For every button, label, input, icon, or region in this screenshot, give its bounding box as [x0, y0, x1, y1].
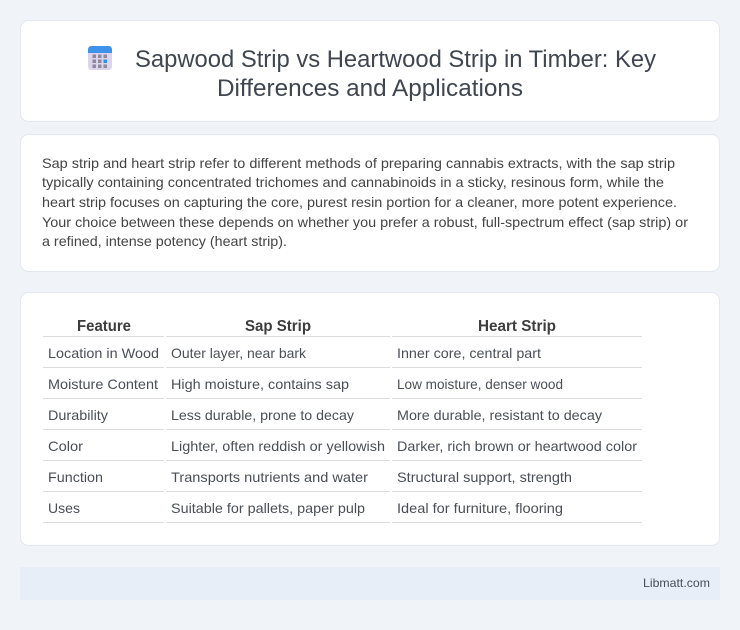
title	[135, 46, 656, 102]
row: moisture content	[48, 376, 563, 392]
row: moisture content: Moisture Content	[48, 376, 158, 392]
row: location in wood: Inner core, central part	[397, 345, 541, 361]
title: Sapwood Strip vs Heartwood Strip in Timber: Key	[135, 46, 656, 73]
row: color: Darker, rich brown or heartwood color	[397, 438, 637, 454]
row: location in wood: Location in Wood	[48, 345, 159, 361]
text block: introduction: a refined, intense potency (heart strip).	[42, 233, 287, 249]
panel: title header	[20, 20, 720, 122]
text block: introduction	[42, 155, 688, 249]
title: Differences and Applications	[217, 75, 523, 102]
row: durability: Durability	[48, 407, 108, 423]
text block: introduction: typically containing concentrated trichomes and cannabinoids in a sticky, resinous form, while the	[42, 174, 664, 190]
text block: introduction: Your choice between these depends on whether you prefer a robust, full-spectrum effect (sap strip) or	[42, 214, 688, 230]
text block: introduction: heart strip focuses on capturing the core, purest resin portion for a cleaner, more potent experience.	[42, 194, 677, 210]
row: uses: Ideal for furniture, flooring	[397, 500, 563, 516]
row: location in wood: Outer layer, near bark	[171, 345, 307, 361]
row: color: Lighter, often reddish or yellowish	[171, 438, 385, 454]
row: durability	[48, 407, 602, 423]
row: function: Transports nutrients and water	[171, 469, 368, 485]
row: moisture content: High moisture, contains sap	[171, 376, 349, 392]
table header: Sap Strip	[245, 318, 311, 335]
icon: calendar	[88, 46, 112, 70]
row: uses: Suitable for pallets, paper pulp	[171, 500, 365, 516]
row: location in wood	[48, 345, 541, 361]
row: function	[48, 469, 572, 485]
footer	[20, 567, 720, 600]
table header: Feature	[77, 318, 131, 335]
row: durability: Less durable, prone to decay	[171, 407, 354, 423]
table header	[77, 318, 556, 335]
text block: introduction: Sap strip and heart strip refer to different methods of preparing cannabis extracts, with the sap strip	[42, 155, 675, 171]
row: moisture content: Low moisture, denser wood	[397, 376, 563, 392]
row: function: Function	[48, 469, 103, 485]
panel: introduction	[20, 134, 720, 272]
footer: Libmatt.com	[643, 576, 710, 590]
table header: Heart Strip	[478, 318, 556, 335]
row: color	[48, 438, 637, 454]
row: function: Structural support, strength	[397, 469, 572, 485]
row: color: Color	[48, 438, 83, 454]
row: uses: Uses	[48, 500, 80, 516]
panel: comparison table	[20, 292, 720, 546]
row: uses	[48, 500, 563, 516]
row: durability: More durable, resistant to decay	[397, 407, 602, 423]
